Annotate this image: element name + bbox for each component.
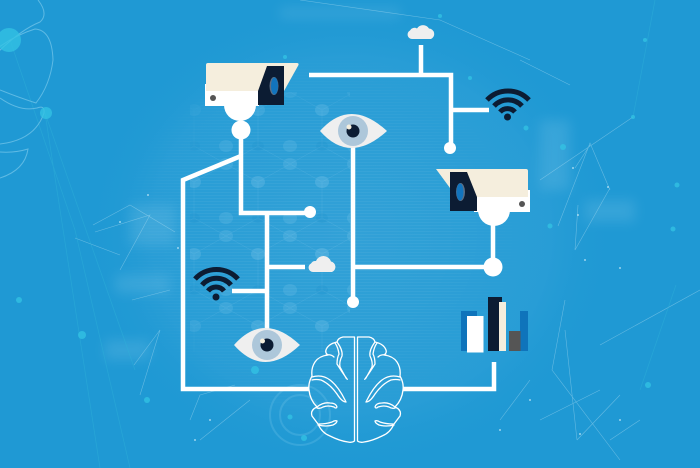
icon: wifi right [487, 91, 529, 120]
left hemisphere [309, 337, 354, 442]
icon: wifi left [195, 269, 238, 300]
icon: cloud middle [309, 256, 335, 272]
right hemisphere [358, 337, 403, 442]
icon: security camera left [205, 63, 299, 121]
connector node dots [232, 120, 502, 308]
icon: security camera right [436, 169, 530, 226]
icon: eye lower [234, 328, 300, 362]
icon: eye upper [320, 114, 387, 148]
connector lines [183, 45, 494, 389]
icon: brain outline [309, 337, 403, 442]
bar chart [461, 297, 528, 352]
icon: cloud top [408, 25, 434, 39]
